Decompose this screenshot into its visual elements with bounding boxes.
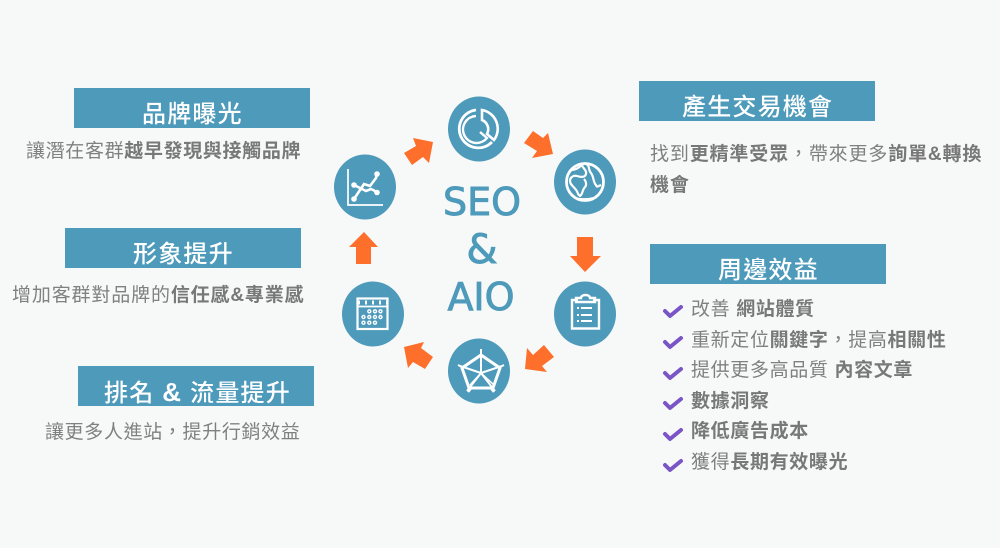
heading: image improvement: 形象提升 bbox=[133, 241, 234, 268]
center title: AIO bbox=[447, 275, 515, 319]
heading: brand exposure bbox=[74, 88, 310, 128]
center title: & bbox=[466, 227, 498, 273]
icon: radar chart bbox=[448, 338, 510, 404]
arrows bbox=[349, 131, 601, 372]
center title bbox=[443, 180, 521, 319]
heading: brand exposure: 品牌曝光 bbox=[142, 101, 243, 128]
icon: donut chart bbox=[448, 96, 510, 162]
heading: side benefits bbox=[650, 244, 886, 284]
text: transaction description: 機會 bbox=[650, 175, 690, 196]
heading: image improvement bbox=[65, 228, 301, 268]
text: image improvement description: 增加客群對品牌的信任感&專業感 bbox=[12, 285, 304, 306]
heading: side benefits: 周邊效益 bbox=[718, 257, 819, 284]
benefit: site quality: 改善 網站體質 bbox=[691, 299, 815, 320]
benefit: long term exposure: 獲得長期有效曝光 bbox=[691, 452, 848, 473]
text: transaction description bbox=[650, 144, 982, 196]
benefit: lower ad cost: 降低廣告成本 bbox=[691, 421, 809, 442]
icon: calendar bbox=[342, 282, 404, 346]
text: transaction description: 找到更精準受眾，帶來更多詢單&轉換 bbox=[650, 144, 982, 165]
heading: transaction opportunities bbox=[639, 81, 875, 121]
benefit: content: 提供更多高品質 內容文章 bbox=[691, 360, 913, 381]
center title: SEO bbox=[443, 180, 521, 224]
icon: globe bbox=[554, 150, 616, 214]
benefit: keywords: 重新定位關鍵字，提高相關性 bbox=[691, 330, 946, 351]
text: ranking description: 讓更多人進站，提升行銷效益 bbox=[45, 422, 300, 443]
icon: line chart bbox=[334, 154, 396, 220]
benefits list bbox=[691, 298, 946, 473]
heading: transaction opportunities: 產生交易機會 bbox=[682, 94, 833, 121]
heading: ranking and traffic bbox=[78, 366, 314, 406]
benefit: data insight: 數據洞察 bbox=[691, 391, 770, 412]
icon: clipboard bbox=[554, 282, 616, 346]
text: brand exposure description: 讓潛在客群越早發現與接觸品牌 bbox=[26, 141, 301, 162]
check marks bbox=[665, 307, 681, 470]
